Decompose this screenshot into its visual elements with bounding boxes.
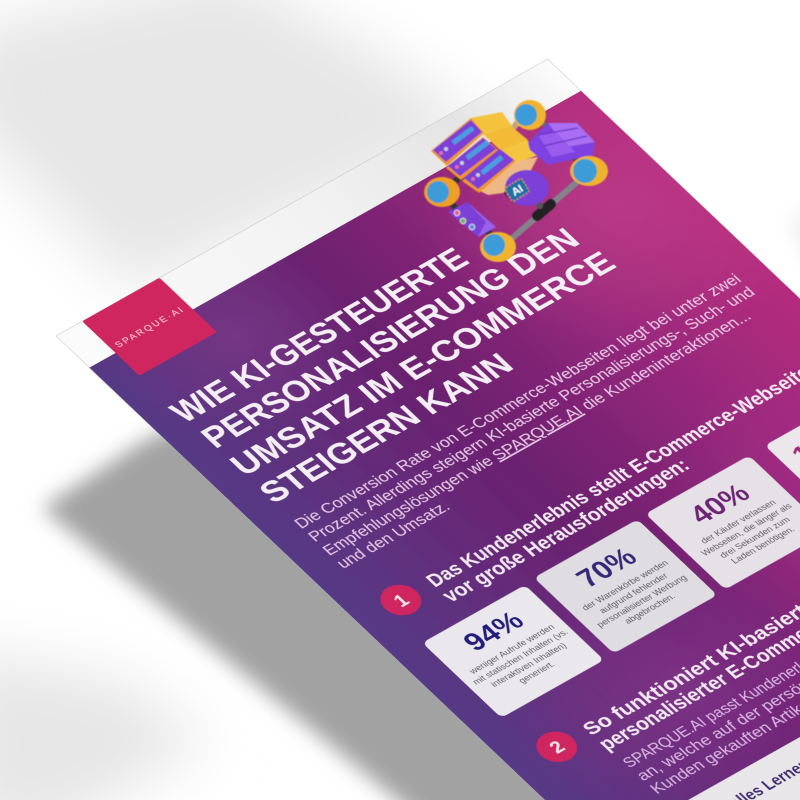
stat card 94%: interaktiven Inhalten) — [489, 641, 569, 689]
server stack — [431, 112, 539, 195]
stat card 40%: drei Sekunden zum — [718, 515, 792, 560]
stat card 70%: 70% — [570, 543, 644, 594]
stat card 94% — [422, 585, 604, 718]
logo block — [82, 278, 217, 376]
title: PERSONALISIERUNG DEN — [194, 222, 587, 455]
number badge 1 — [372, 579, 430, 621]
page drop shadow — [42, 400, 620, 800]
illustration: AI server network — [424, 100, 608, 262]
stat card 70% — [534, 519, 717, 653]
joint left — [424, 177, 460, 207]
stat card 40%: Laden benötigen. — [729, 525, 797, 566]
feature card — [628, 574, 800, 800]
small control box — [448, 202, 496, 237]
title: UMSATZ IM E-COMMERCE — [223, 246, 623, 482]
stat card 70%: abgebrochen. — [622, 592, 677, 626]
stat card 70%: aufgrund fehlender — [597, 571, 670, 615]
stat card 94%: mit statischen Inhalten (vs. — [471, 628, 570, 687]
joint right — [570, 156, 608, 186]
logo block: SPARQUE·AI — [113, 306, 186, 350]
number badge 2: 2 — [546, 738, 570, 758]
number badge 2 — [528, 726, 586, 768]
panel: gradient body — [89, 91, 800, 800]
stat card 40%: Webseiten, die länger als — [699, 501, 795, 558]
stat card 4 — [765, 389, 800, 519]
stat card 94%: generiert. — [517, 660, 557, 685]
stat card 40% — [645, 456, 800, 590]
stat card 70%: personalisierter Werbung — [595, 573, 689, 629]
intro paragraph: Prozent. Allerdings steigern KI-basierte Personalisierungs-, Such- und — [305, 284, 759, 545]
intro paragraph: und den Umsatz. — [333, 499, 454, 572]
number badge 1: 1 — [390, 591, 414, 611]
section 1 heading: vor große Herausforderungen: — [437, 454, 694, 606]
stat card 94%: 94% — [457, 607, 531, 657]
title: STEIGERN KANN — [252, 347, 521, 510]
rods — [450, 120, 582, 240]
stat card 94%: weniger Aufrufe werden — [467, 623, 557, 676]
stat card 70%: der Warenkörbe werden — [580, 558, 671, 612]
stat card 40%: 40% — [683, 479, 757, 530]
title: WIE KI-GESTEUERTE — [163, 242, 477, 429]
joint top — [514, 100, 546, 130]
intro paragraph: Empfehlungslösungen wie SPARQUE.AI die Kundeninteraktionen... — [319, 308, 755, 559]
purple block — [528, 123, 595, 165]
joint bottom — [480, 232, 516, 262]
AI chip sphere: AI — [510, 183, 525, 199]
stat card 40%: der Käufer verlassen — [699, 498, 778, 546]
AI chip sphere — [504, 170, 549, 206]
intro paragraph: Die Conversion Rate von E-Commerce-Webseiten liegt bei unter zwei — [291, 271, 745, 532]
